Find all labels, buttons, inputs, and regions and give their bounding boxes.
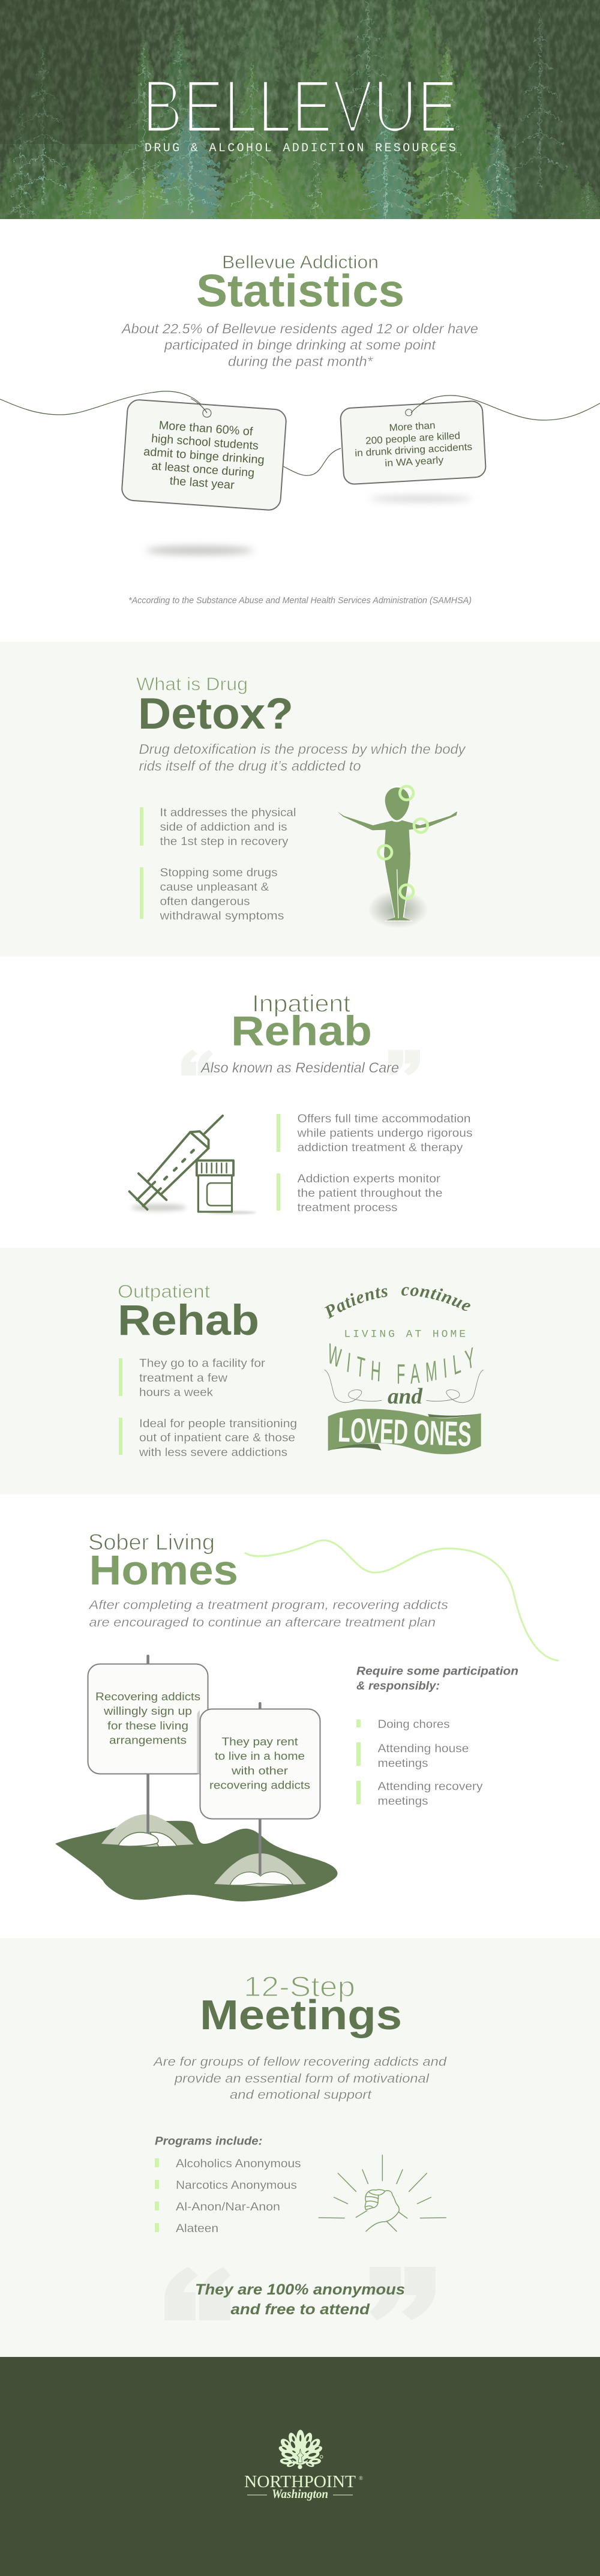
detox definition: Drug detoxification is the process by which the body bbox=[139, 741, 466, 757]
panel: sober living homes bbox=[55, 1530, 559, 1901]
quote marks bbox=[181, 1050, 420, 1076]
callout: high school students tag: high school students bbox=[151, 432, 259, 453]
logo wordmark: NORTHPOINT bbox=[244, 2473, 356, 2491]
point: transitioning bbox=[119, 1418, 297, 1459]
heading: Detox?: Detox? bbox=[138, 690, 293, 738]
list: responsibilities: meetings bbox=[378, 1757, 428, 1770]
meetings description bbox=[152, 2054, 447, 2102]
sign one: recovering addicts: for these living bbox=[107, 1719, 188, 1732]
list: programs: Alateen bbox=[176, 2222, 218, 2235]
point: facility hours: hours a week bbox=[139, 1386, 214, 1399]
shadow: tag one bbox=[146, 546, 254, 555]
callout: high school students tag: the last year bbox=[169, 474, 235, 492]
ground with hills bbox=[55, 1814, 337, 1901]
subheading: Also known as Residential Care bbox=[200, 1060, 399, 1076]
sign two: they pay rent: to live in a home bbox=[215, 1750, 305, 1762]
callout: high school students tag: admit to binge drinking bbox=[143, 445, 265, 467]
sign one: recovering addicts: Recovering addicts bbox=[95, 1690, 200, 1703]
heading: Outpatient: Outpatient bbox=[118, 1281, 210, 1302]
callout: high school students tag: at least once during bbox=[151, 459, 255, 480]
logo: northpoint washington bbox=[244, 2430, 363, 2501]
point: withdrawal: often dangerous bbox=[160, 895, 250, 908]
flourishes bbox=[325, 1370, 484, 1403]
subtitle: DRUG & ALCOHOL ADDICTION RESOURCES bbox=[145, 142, 456, 155]
logo script: Washington: Washington bbox=[272, 2487, 328, 2501]
intro text: during the past month* bbox=[228, 354, 373, 369]
ribbon bbox=[328, 1409, 481, 1454]
heading: Inpatient: Inpatient bbox=[252, 990, 350, 1017]
point: accommodation: addiction treatment & therapy bbox=[298, 1142, 463, 1154]
lettering line: living at home: LIVING AT HOME bbox=[344, 1329, 466, 1341]
lettering line: and: and bbox=[388, 1384, 423, 1409]
point: addiction experts bbox=[277, 1173, 443, 1214]
list: programs: Narcotics Anonymous bbox=[176, 2179, 297, 2192]
callout: drunk driving tag bbox=[340, 400, 486, 485]
point: physical side: It addresses the physical bbox=[160, 807, 296, 819]
point: facility hours: They go to a facility for bbox=[139, 1358, 266, 1370]
logo rules bbox=[247, 2494, 353, 2496]
point: transitioning: with less severe addictions bbox=[139, 1446, 287, 1459]
detox definition: rids itself of the drug it’s addicted to bbox=[139, 758, 361, 774]
list: responsibilities: Attending recovery bbox=[378, 1780, 483, 1793]
callout: anonymous and free bbox=[195, 2281, 405, 2318]
point: addiction experts: treatment process bbox=[298, 1202, 397, 1214]
point: withdrawal: withdrawal symptoms bbox=[159, 910, 284, 922]
point: physical side: side of addiction and is bbox=[160, 821, 287, 834]
panel: 12-step meetings bbox=[0, 1938, 600, 2357]
intro text bbox=[121, 320, 478, 369]
point: addiction experts: the patient throughout the bbox=[298, 1187, 443, 1200]
icon: human figure with rings bbox=[336, 786, 459, 928]
forest background bbox=[0, 0, 600, 405]
sign two: they pay rent: recovering addicts bbox=[209, 1779, 310, 1791]
callout: drunk driving tag: More than bbox=[389, 420, 436, 433]
footer bbox=[0, 2357, 600, 2576]
sign two: they pay rent: They pay rent bbox=[222, 1735, 298, 1748]
point: addiction experts: Addiction experts monitor bbox=[298, 1173, 441, 1185]
heading: Meetings: Meetings bbox=[200, 1991, 402, 2038]
hanging wire bbox=[0, 391, 600, 420]
point: accommodation: Offers full time accommodation bbox=[298, 1113, 470, 1125]
intro text: About 22.5% of Bellevue residents aged 12 or older have bbox=[121, 320, 478, 336]
decorative wave bbox=[245, 1540, 559, 1661]
icon: clasped hands bbox=[319, 2155, 446, 2231]
ribbon folds bbox=[331, 1413, 481, 1451]
lettering: patients continue living at home bbox=[324, 1287, 484, 1454]
responsibility heading: Require some participation bbox=[356, 1665, 518, 1678]
point: physical side: the 1st step in recovery bbox=[160, 835, 289, 848]
callout: anonymous and free: and free to attend bbox=[230, 2301, 370, 2318]
sober living description bbox=[88, 1598, 448, 1630]
meetings description: Are for groups of fellow recovering addicts and bbox=[152, 2054, 447, 2069]
heading: Bellevue Addiction: Bellevue Addiction bbox=[222, 251, 379, 272]
heading: Rehab: Rehab bbox=[118, 1297, 259, 1344]
callout: high school students tag bbox=[121, 399, 287, 511]
sign one: recovering addicts: arrangements bbox=[109, 1733, 187, 1747]
lettering line: with family: WITH FAMILY bbox=[329, 1343, 473, 1384]
lettering line: loved ones: LOVED ONES bbox=[337, 1411, 472, 1454]
shadow: tag two bbox=[369, 496, 472, 502]
sign two: they pay rent bbox=[200, 1702, 320, 1875]
logo registered mark: ® bbox=[359, 2475, 363, 2481]
panel: inpatient rehab bbox=[130, 990, 473, 1214]
point: facility hours bbox=[119, 1358, 266, 1399]
list: responsibilities: meetings bbox=[378, 1795, 428, 1808]
heading: 12-Step: 12-Step bbox=[244, 1970, 355, 2002]
detox definition bbox=[139, 741, 466, 774]
point: withdrawal bbox=[140, 867, 284, 922]
panel: outpatient rehab bbox=[0, 1248, 600, 1494]
list: responsibilities: Attending house bbox=[378, 1743, 469, 1755]
quote marks bbox=[164, 2267, 436, 2320]
point: physical side bbox=[140, 807, 296, 848]
meetings description: provide an essential form of motivational bbox=[174, 2071, 430, 2086]
list: programs: Alcoholics Anonymous bbox=[176, 2158, 301, 2170]
list: responsibilities bbox=[356, 1718, 483, 1808]
header: forest photo with title bbox=[0, 0, 600, 259]
point: withdrawal: Stopping some drugs bbox=[160, 867, 277, 879]
point: transitioning: out of inpatient care & those bbox=[139, 1432, 295, 1444]
point: facility hours: treatment a few bbox=[139, 1372, 227, 1385]
sober living description: are encouraged to continue an aftercare treatment plan bbox=[89, 1615, 436, 1630]
intro text: participated in binge drinking at some point bbox=[164, 337, 437, 353]
callout: high school students tag: More than 60% of bbox=[158, 419, 254, 439]
panel: what is drug detox bbox=[0, 642, 600, 957]
heading: Rehab: Rehab bbox=[231, 1007, 372, 1054]
point: accommodation bbox=[277, 1113, 473, 1154]
sober living description: After completing a treatment program, recovering addicts bbox=[88, 1598, 448, 1612]
programs heading: Programs include: bbox=[155, 2134, 263, 2147]
heading: Statistics: Statistics bbox=[196, 265, 404, 317]
panel: statistics bbox=[0, 251, 600, 606]
point: withdrawal: cause unpleasant & bbox=[160, 881, 269, 894]
point: transitioning: Ideal for people transitioning bbox=[139, 1418, 297, 1430]
callout: drunk driving tag: in drunk driving accidents bbox=[355, 442, 473, 459]
callout: drunk driving tag: 200 people are killed bbox=[365, 430, 460, 447]
point: accommodation: while patients undergo rigorous bbox=[296, 1127, 473, 1140]
footnote: *According to the Substance Abuse and Mental Health Services Administration (SAMHSA) bbox=[128, 596, 472, 606]
heading: What is Drug: What is Drug bbox=[136, 673, 248, 694]
meetings description: and emotional support bbox=[230, 2087, 372, 2102]
sign one: recovering addicts bbox=[88, 1655, 208, 1834]
wire ends over tags bbox=[191, 399, 425, 413]
heading: Sober Living: Sober Living bbox=[88, 1530, 215, 1554]
responsibility heading: & responsibly: bbox=[356, 1679, 440, 1693]
icon: syringe and pill bottle bbox=[130, 1116, 256, 1214]
lettering line: patients continue: Patients continue bbox=[325, 1287, 470, 1319]
list: programs bbox=[155, 2158, 301, 2235]
sign one: recovering addicts: willingly sign up bbox=[103, 1705, 192, 1717]
heading: Homes: Homes bbox=[89, 1547, 238, 1593]
logo peacock bbox=[278, 2430, 323, 2469]
sign two: they pay rent: with other bbox=[231, 1765, 288, 1777]
list: responsibilities: Doing chores bbox=[378, 1718, 450, 1731]
connecting wires bbox=[283, 448, 341, 475]
responsibility heading bbox=[356, 1665, 518, 1693]
callout: anonymous and free: They are 100% anonymous bbox=[195, 2281, 405, 2298]
callout: drunk driving tag: in WA yearly bbox=[385, 455, 445, 469]
list: programs: Al-Anon/Nar-Anon bbox=[176, 2201, 280, 2213]
title: BELLEVUE bbox=[142, 65, 458, 148]
